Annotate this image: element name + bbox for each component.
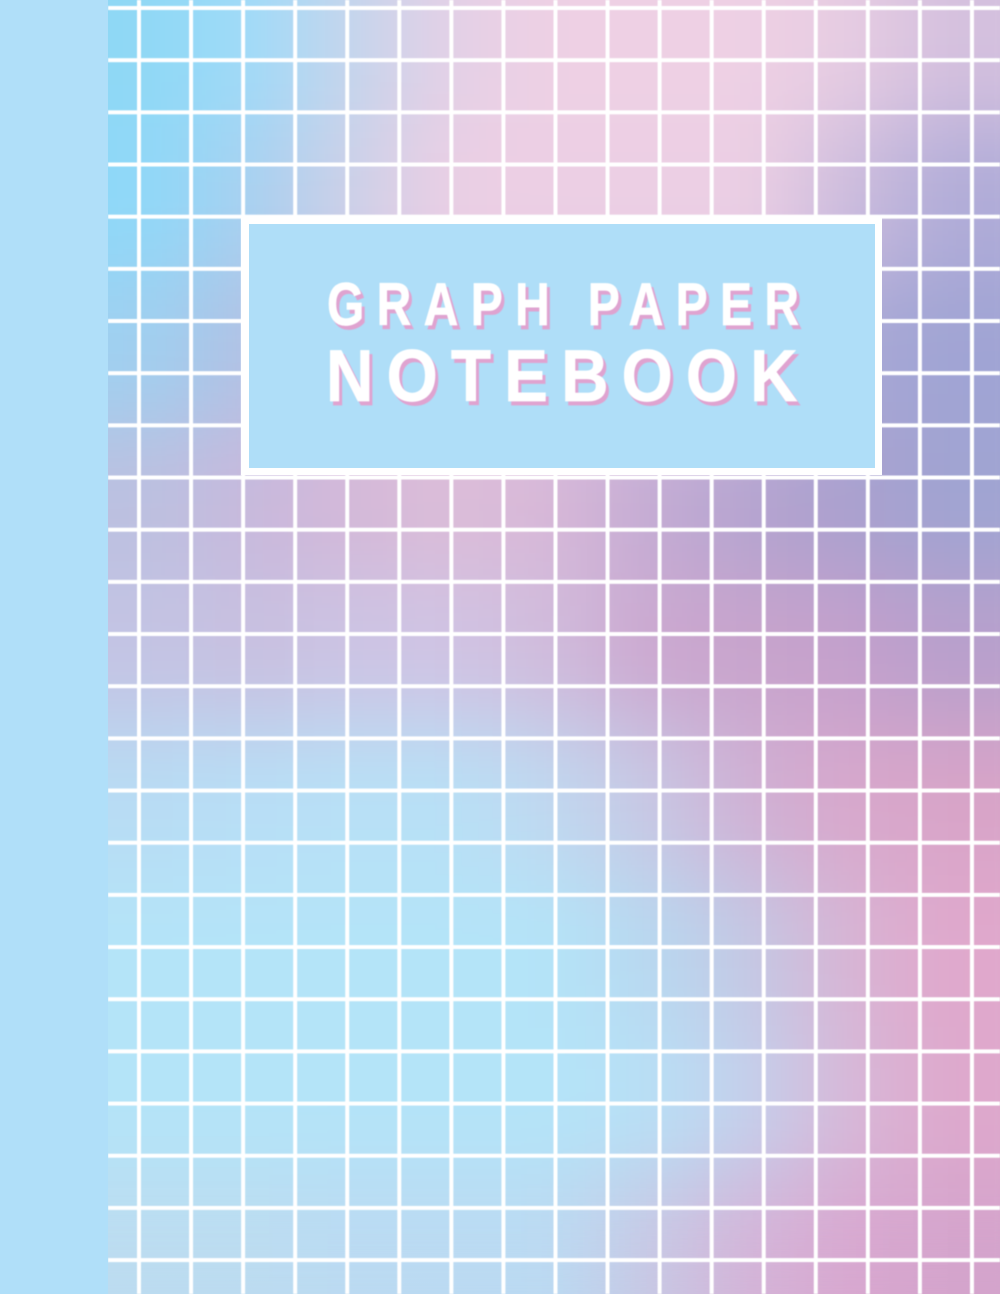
title text	[326, 271, 799, 417]
title line: Graph Paper: GRAPH PAPER	[327, 271, 799, 338]
title panel	[241, 216, 882, 475]
panel fill	[249, 224, 875, 468]
title line: Notebook: NOTEBOOK	[326, 335, 798, 417]
left spine band	[0, 0, 108, 1294]
panel white border	[241, 216, 882, 475]
